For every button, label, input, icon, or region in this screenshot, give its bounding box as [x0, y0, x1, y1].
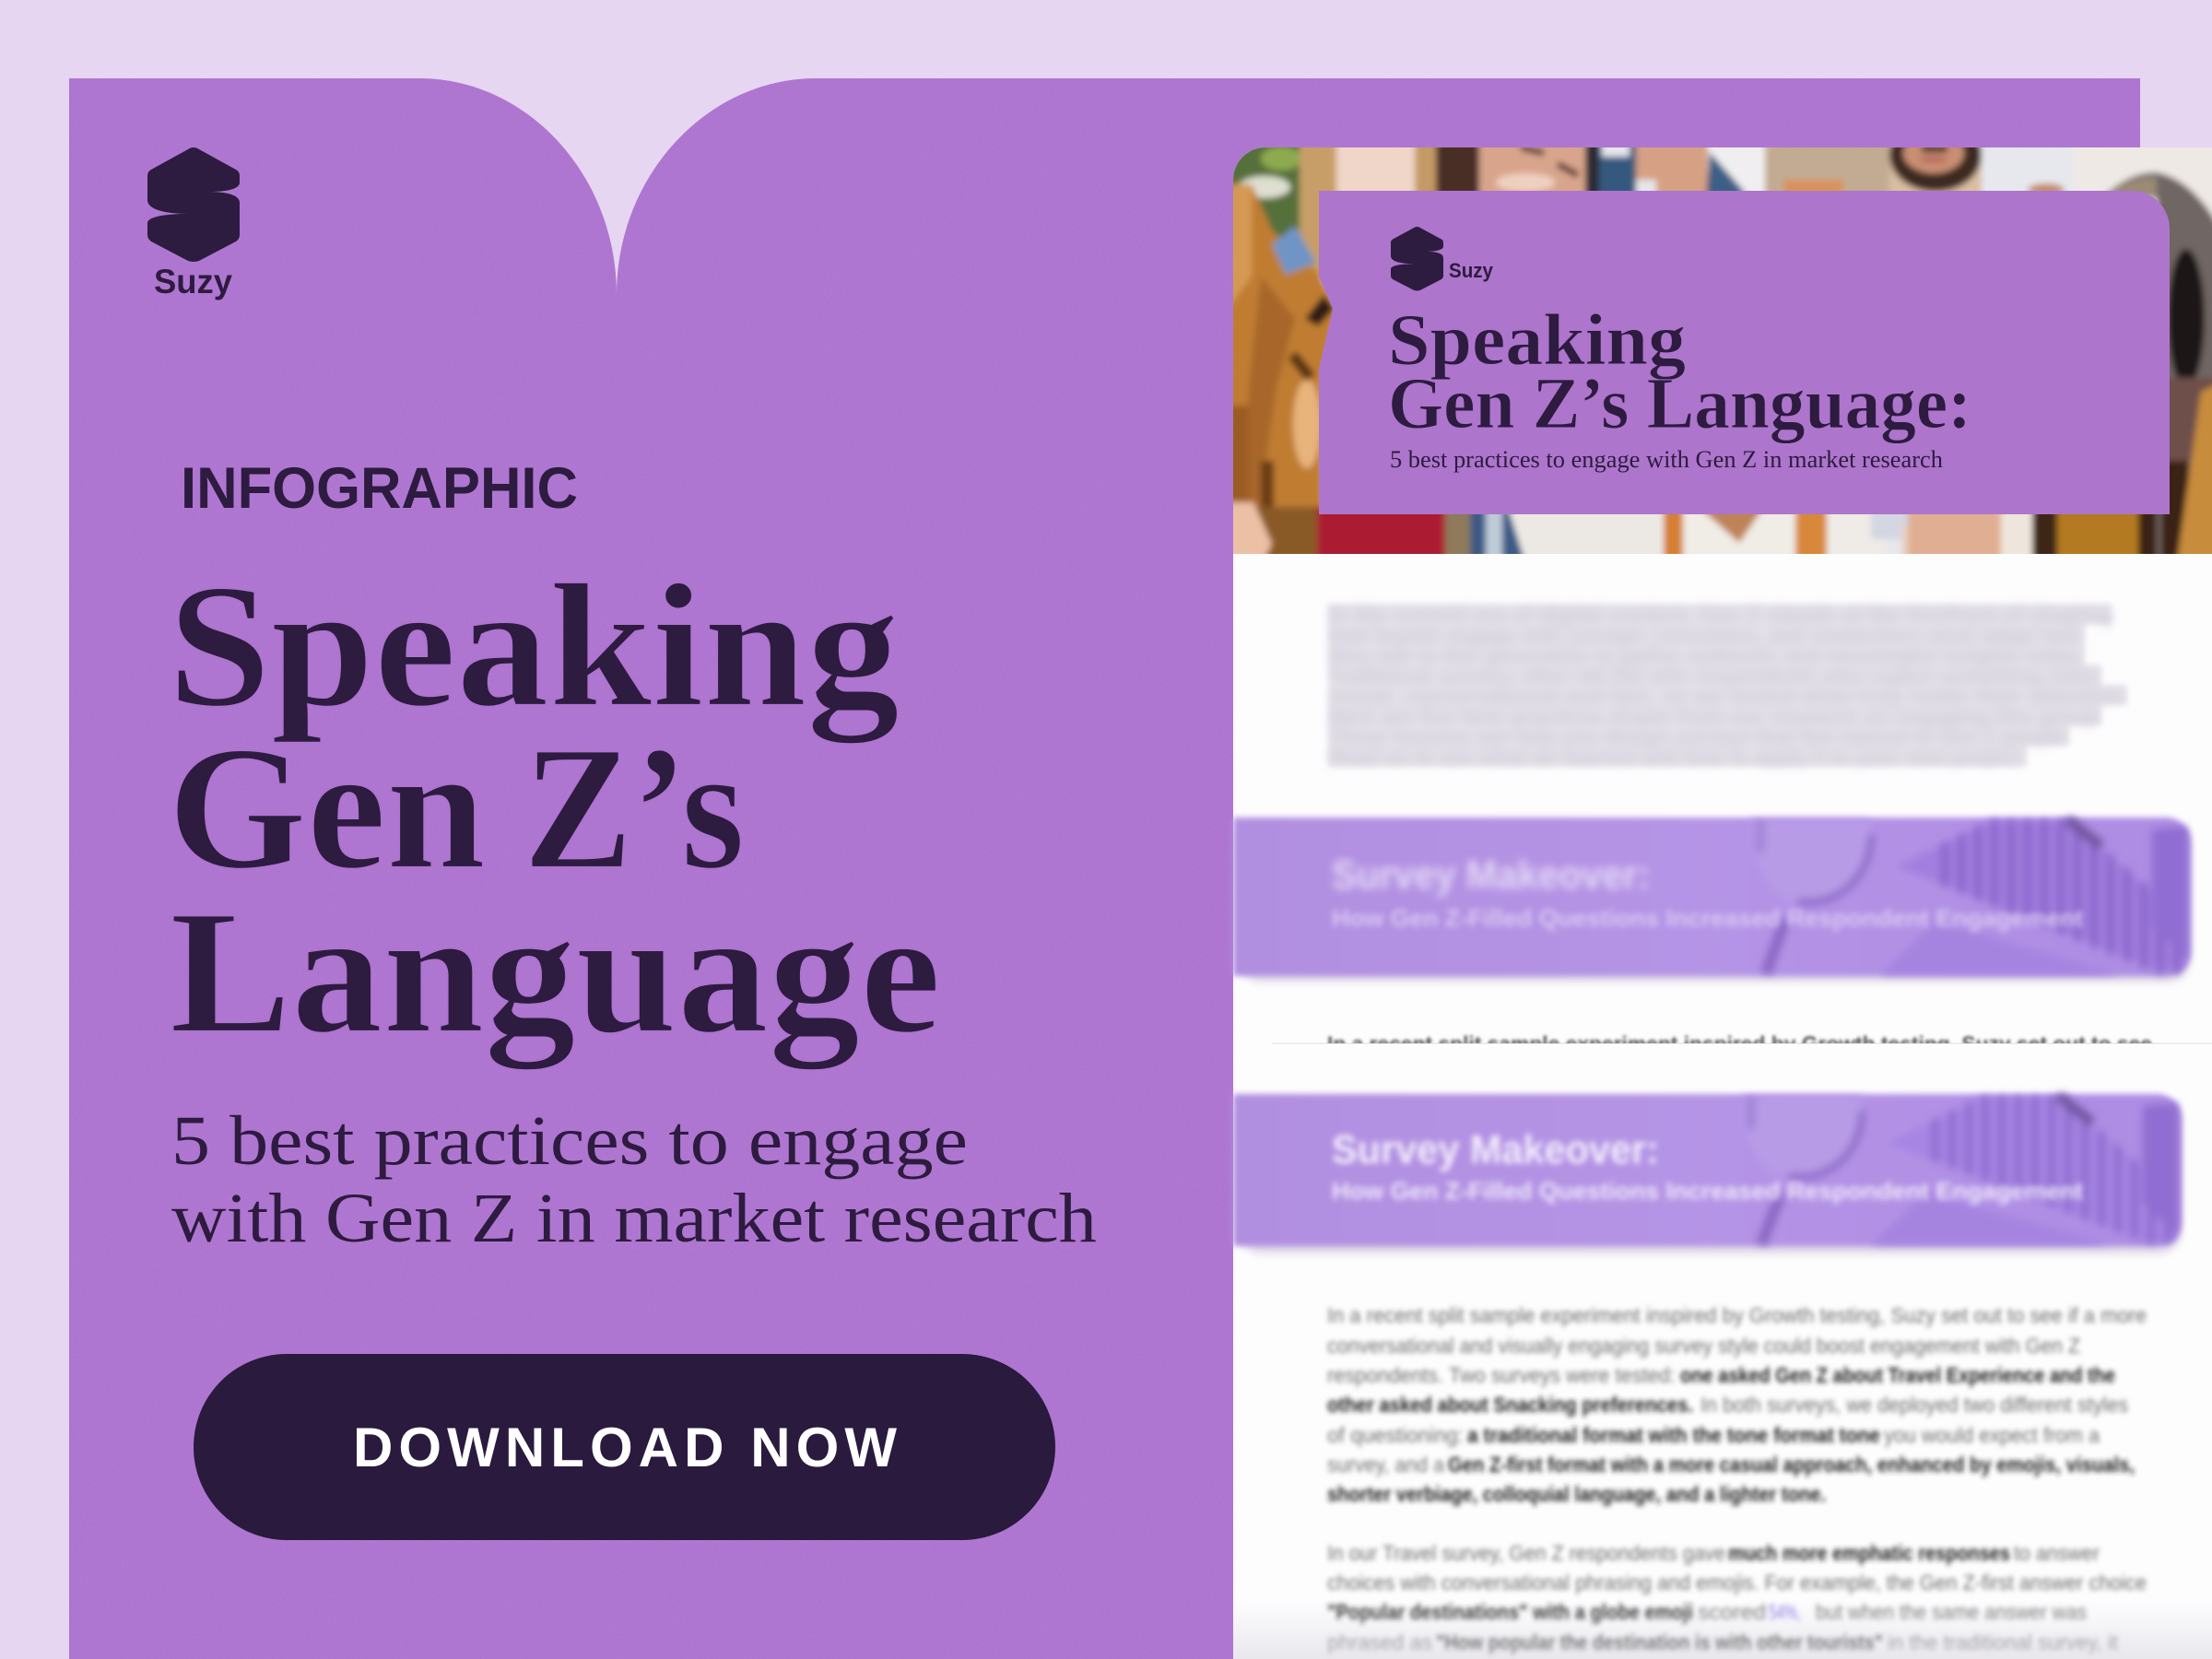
text block: blurred intro paragraph	[1328, 603, 2127, 769]
text block: blurred body paragraph one: you would expect from a	[1884, 1423, 2100, 1447]
text block: blurred body paragraph two: in the traditional survey, it	[1888, 1630, 2119, 1654]
text block: blurred intro paragraph: Here are five best practices drawn from our research on engaging this group	[1329, 704, 2099, 728]
panel: document preview	[1226, 118, 2212, 1659]
logo: Suzy	[147, 147, 240, 300]
text block: blurred body paragraph one: of questioning:	[1327, 1423, 1464, 1447]
text block: blurred intro paragraph: visual, conversational and fast, so we tested what truly holds their attention	[1329, 684, 2122, 708]
icon: small Suzy logo: Suzy	[1449, 259, 1494, 282]
cover subtitle: 5 best practices to engage with Gen Z in market research	[1390, 446, 1943, 473]
logo: Suzy: Suzy	[154, 263, 232, 300]
banner heading: Survey Makeover:	[1332, 1127, 1659, 1172]
text block: blurred body paragraph one: In a recent split sample experiment inspired by Growth testing, Suzy set out to see if a more	[1327, 1303, 2147, 1327]
banner illustration	[1742, 1092, 2178, 1253]
text block: blurred intro paragraph: how brands engage with younger consumers, and researchers must adapt how	[1329, 623, 2080, 647]
label: INFOGRAPHIC: INFOGRAPHIC	[181, 456, 578, 521]
text block: blurred body paragraph two: phrased as	[1327, 1630, 1432, 1654]
right hair	[2101, 172, 2212, 562]
text block: blurred body paragraph one: In both surveys, we deployed two different styles	[1700, 1393, 2128, 1417]
banner subheading: How Gen Z-Filled Questions Increased Respondent Engagement	[1332, 904, 2083, 932]
text block: blurred intro paragraph: These lessons can help you design surveys that feel natural to Gen Z people	[1329, 724, 2066, 748]
text block: blurred body paragraph one: Gen Z-first format with a more casual approach, enhanced by emojis, visuals,	[1448, 1453, 2135, 1477]
bottom row of clothes	[1257, 504, 1324, 554]
cover title	[1388, 300, 1971, 444]
text block: blurred intro paragraph: In the current era of digital content, Gen Z stands at the forefront of shaping	[1329, 603, 2112, 627]
button: download now	[194, 1354, 1055, 1540]
button: download now: DOWNLOAD NOW	[353, 1417, 897, 1478]
subtitle	[171, 1102, 1097, 1257]
cover title: Gen Z’s Language:	[1388, 364, 1971, 444]
text block: blurred body paragraph two: much more emphatic responses	[1728, 1541, 2010, 1565]
text block: blurred body paragraph two: scored	[1698, 1600, 1766, 1624]
text block: blurred body paragraph two: "Popular destinations" with a globe emoji	[1327, 1600, 1693, 1624]
bottom fade	[1233, 1599, 2212, 1659]
document page	[1233, 147, 2212, 1659]
text block: blurred body paragraph two: 54%,	[1769, 1600, 1801, 1624]
banner subheading: How Gen Z-Filled Questions Increased Respondent Engagement	[1332, 1177, 2083, 1205]
title: Gen	[168, 710, 486, 906]
banner heading: Survey Makeover:	[1332, 853, 1650, 898]
text block: blurred body paragraph two	[1327, 1541, 2147, 1654]
banner illustration	[1751, 816, 2187, 977]
text block: blurred body paragraph one: other asked about Snacking preferences.	[1327, 1393, 1693, 1417]
text block: blurred intro paragraph: Read on to see what we learned and how to apply it to your next project	[1329, 745, 2020, 769]
title: Z’s	[524, 710, 745, 906]
left jacket	[1233, 184, 1333, 513]
text block: blurred body paragraph one: conversational and visually engaging survey style could boost engagement with Gen Z	[1327, 1334, 2080, 1358]
subtitle: with Gen Z in market research	[171, 1180, 1097, 1257]
text block: blurred body paragraph one: a traditional format with the tone format tone	[1467, 1423, 1880, 1447]
text block: clipped line of text: In a recent split sample experiment inspired by Growth testing, Suzy set out to see	[1327, 1032, 2152, 1057]
foliage	[1233, 147, 1305, 241]
text block: blurred body paragraph two: "How popular the destination is with other tourists"	[1436, 1630, 1883, 1654]
text block: blurred body paragraph two: choices with conversational phrasing and emojis. For example, the Gen Z-first answer choice	[1327, 1571, 2147, 1594]
title: Speaking	[168, 547, 900, 745]
text block: blurred body paragraph one	[1327, 1303, 2147, 1506]
text block: blurred intro paragraph: Traditional surveys often fall flat with respondents who expect something more	[1329, 664, 2099, 688]
title	[168, 547, 941, 1071]
text block: blurred body paragraph one: survey, and a	[1327, 1453, 1444, 1477]
text block: blurred body paragraph two: but when the same answer was	[1816, 1600, 2087, 1624]
text block: blurred body paragraph one: one asked Gen Z about Travel Experience and the	[1680, 1363, 2115, 1387]
cover title: Speaking	[1388, 300, 1686, 381]
text block: blurred body paragraph one: respondents. Two surveys were tested:	[1327, 1363, 1676, 1387]
photo: group of young people	[1226, 118, 2212, 562]
text block: blurred intro paragraph: they talk to this generation to gather authentic and meaningful insights today	[1329, 643, 2080, 667]
title: Language	[170, 874, 941, 1071]
beige shirt	[1761, 147, 1896, 191]
text block: blurred body paragraph two: In our Travel survey, Gen Z respondents gave	[1327, 1541, 1725, 1565]
callout card: cover title	[1319, 191, 2170, 514]
subtitle: 5 best practices to engage	[171, 1102, 968, 1180]
banner: Survey Makeover	[1233, 1092, 2182, 1253]
text block: blurred body paragraph one: shorter verbiage, colloquial language, and a lighter tone.	[1327, 1482, 1826, 1506]
smiling face	[1474, 147, 1591, 191]
blonde head	[1294, 147, 1340, 281]
bearded man	[1886, 147, 1985, 191]
banner: Survey Makeover (faded)	[1233, 816, 2191, 982]
icon: small Suzy logo	[1391, 227, 1494, 290]
text block: blurred body paragraph two: to answer	[2014, 1541, 2100, 1565]
